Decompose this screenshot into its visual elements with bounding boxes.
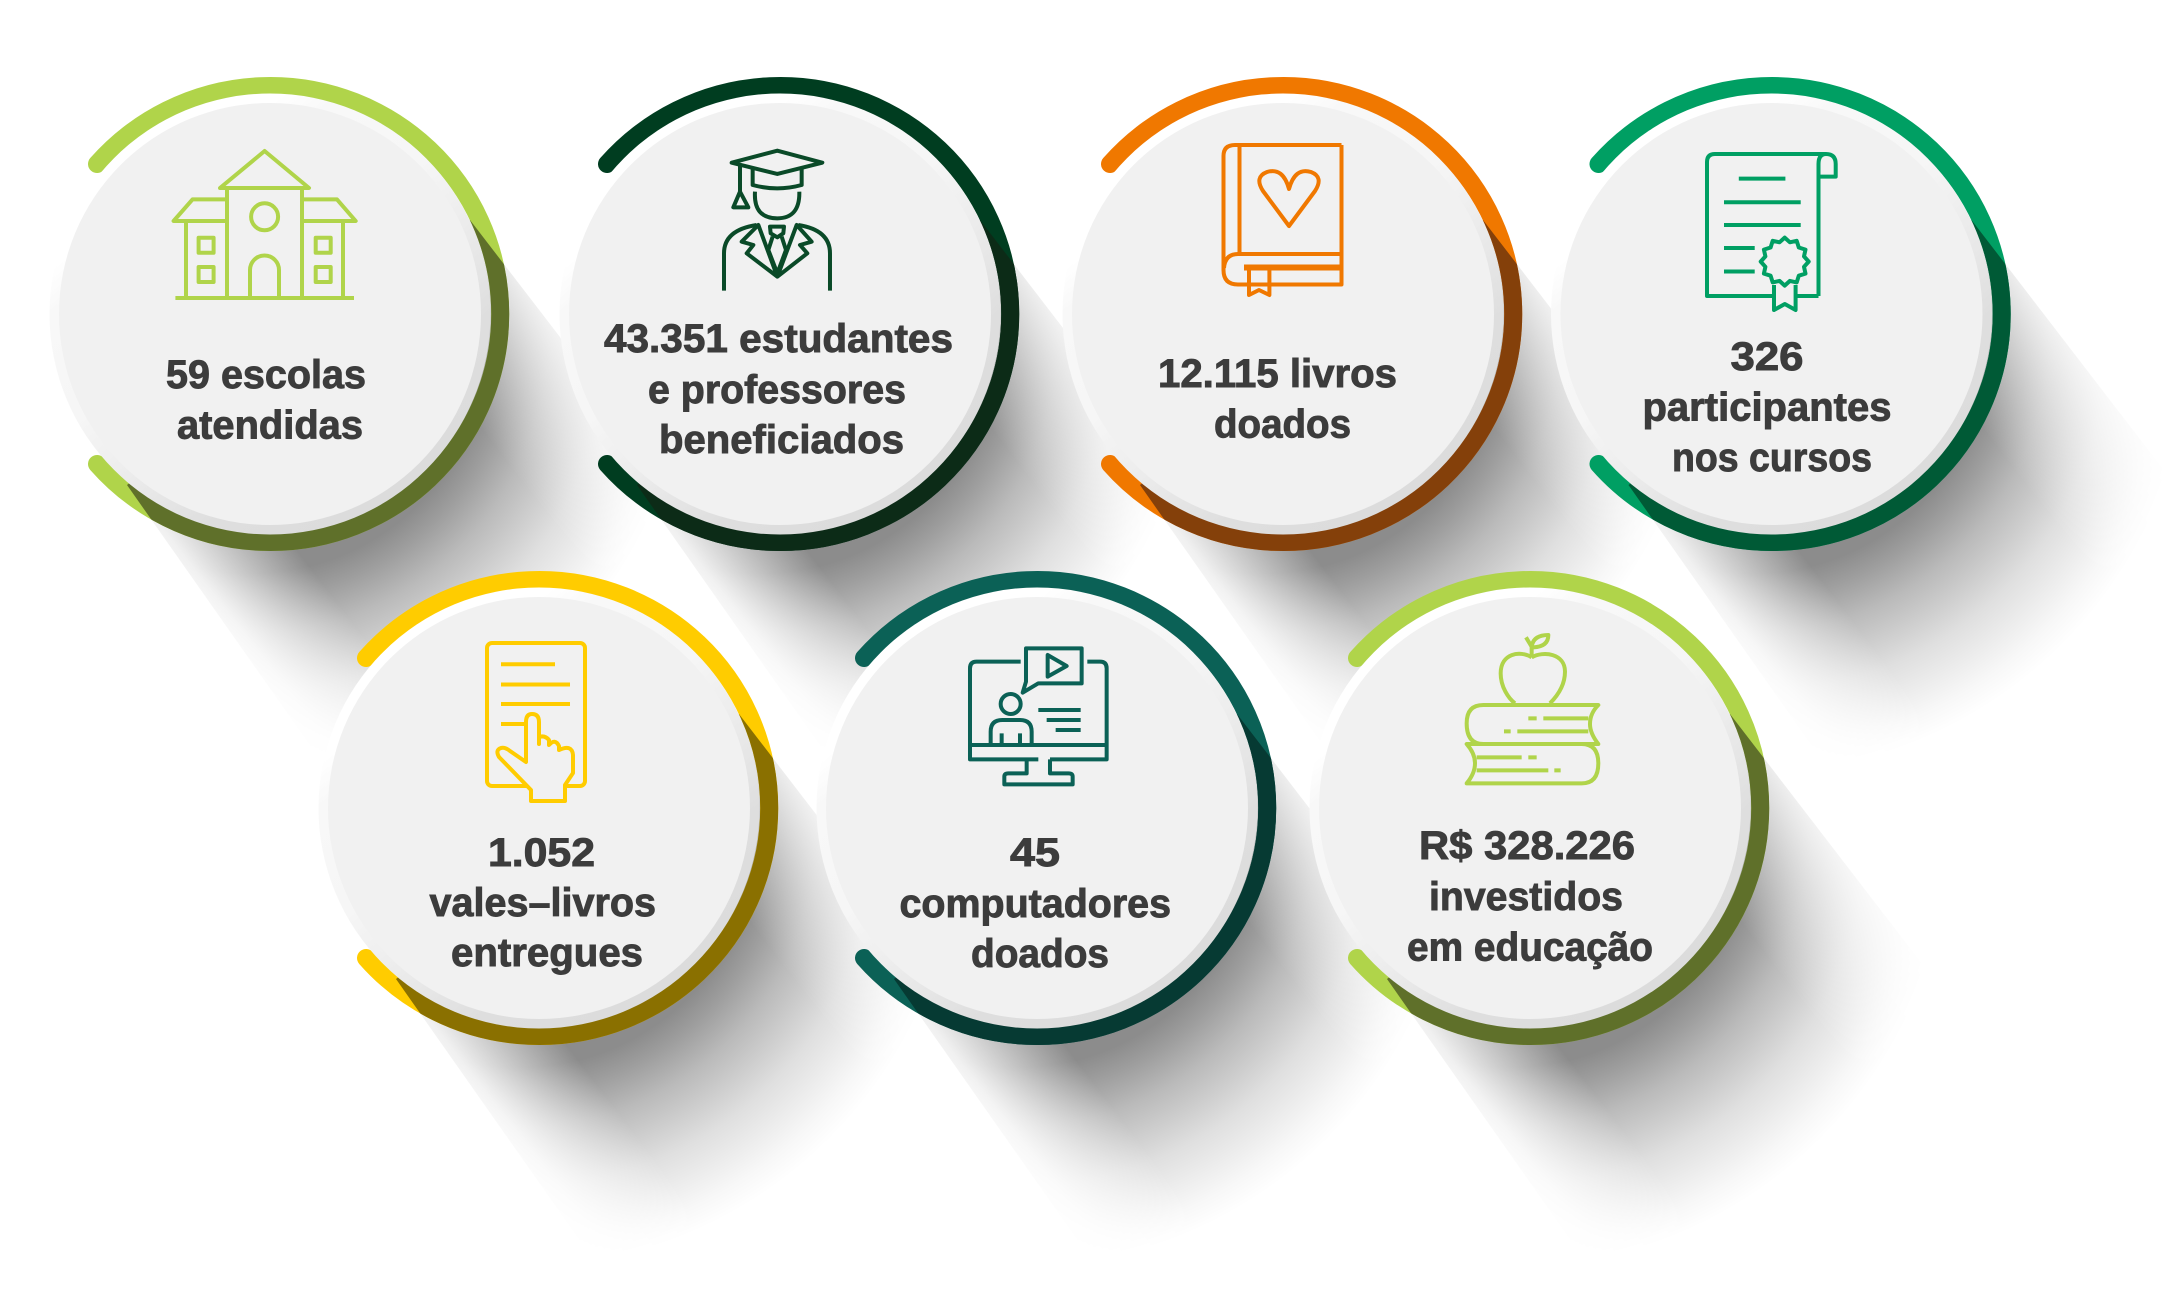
icon: graduate: [724, 151, 830, 291]
label text: beneficiados: [659, 418, 904, 462]
icon: computer with online teacher: [970, 648, 1107, 784]
label text: 12.115 livros: [1158, 352, 1397, 396]
icon: school building: [174, 151, 356, 298]
label text: [1642, 335, 1892, 480]
label text: nos cursos: [1672, 436, 1872, 480]
label text: atendidas: [177, 404, 363, 448]
disc, ring and long shadow: [1064, 77, 1626, 702]
panel: 59 escolas atendidas: [59, 77, 616, 709]
label text: [900, 831, 1171, 976]
label text: entregues: [451, 931, 643, 975]
panel: 1.052 vales-livros entregues: [328, 571, 884, 1212]
disc, ring and long shadow: [328, 571, 884, 1212]
disc, ring and long shadow: [564, 77, 1125, 705]
disc, ring and long shadow: [1310, 571, 1876, 1212]
label text: [166, 353, 366, 448]
label text: 43.351 estudantes: [604, 317, 953, 361]
label text: computadores: [900, 882, 1171, 926]
disc, ring and long shadow: [1551, 77, 2118, 718]
label text: [1407, 824, 1653, 970]
label text: 326: [1730, 335, 1804, 379]
disc, ring and long shadow: [59, 77, 616, 709]
label text: [604, 317, 953, 462]
label text: 1.052: [488, 831, 595, 875]
label text: e professores: [648, 368, 906, 412]
icon: diploma with seal: [1707, 154, 1836, 310]
panel: 12.115 livros doados: [1064, 77, 1626, 702]
label text: 59 escolas: [166, 353, 366, 397]
icon: apple on books: [1467, 635, 1598, 783]
panel: R$ 328.226 investidos em educação: [1310, 571, 1876, 1212]
label text: 45: [1010, 831, 1060, 875]
label text: vales–livros: [430, 881, 656, 925]
icon: document with pointing hand: [487, 643, 585, 801]
label text: em educação: [1407, 926, 1653, 970]
label text: participantes: [1642, 386, 1892, 430]
label text: doados: [971, 932, 1109, 976]
label text: doados: [1214, 402, 1351, 446]
label text: investidos: [1429, 875, 1623, 919]
label text: [430, 831, 656, 975]
panel: 45 computadores doados: [818, 571, 1381, 1212]
disc, ring and long shadow: [818, 571, 1381, 1212]
label text: R$ 328.226: [1419, 824, 1635, 868]
panel: 326 participantes nos cursos: [1551, 77, 2118, 718]
label text: [1158, 352, 1397, 446]
panel: 43.351 estudantes e professores beneficiados: [564, 77, 1125, 705]
icon: book with heart: [1224, 145, 1342, 295]
